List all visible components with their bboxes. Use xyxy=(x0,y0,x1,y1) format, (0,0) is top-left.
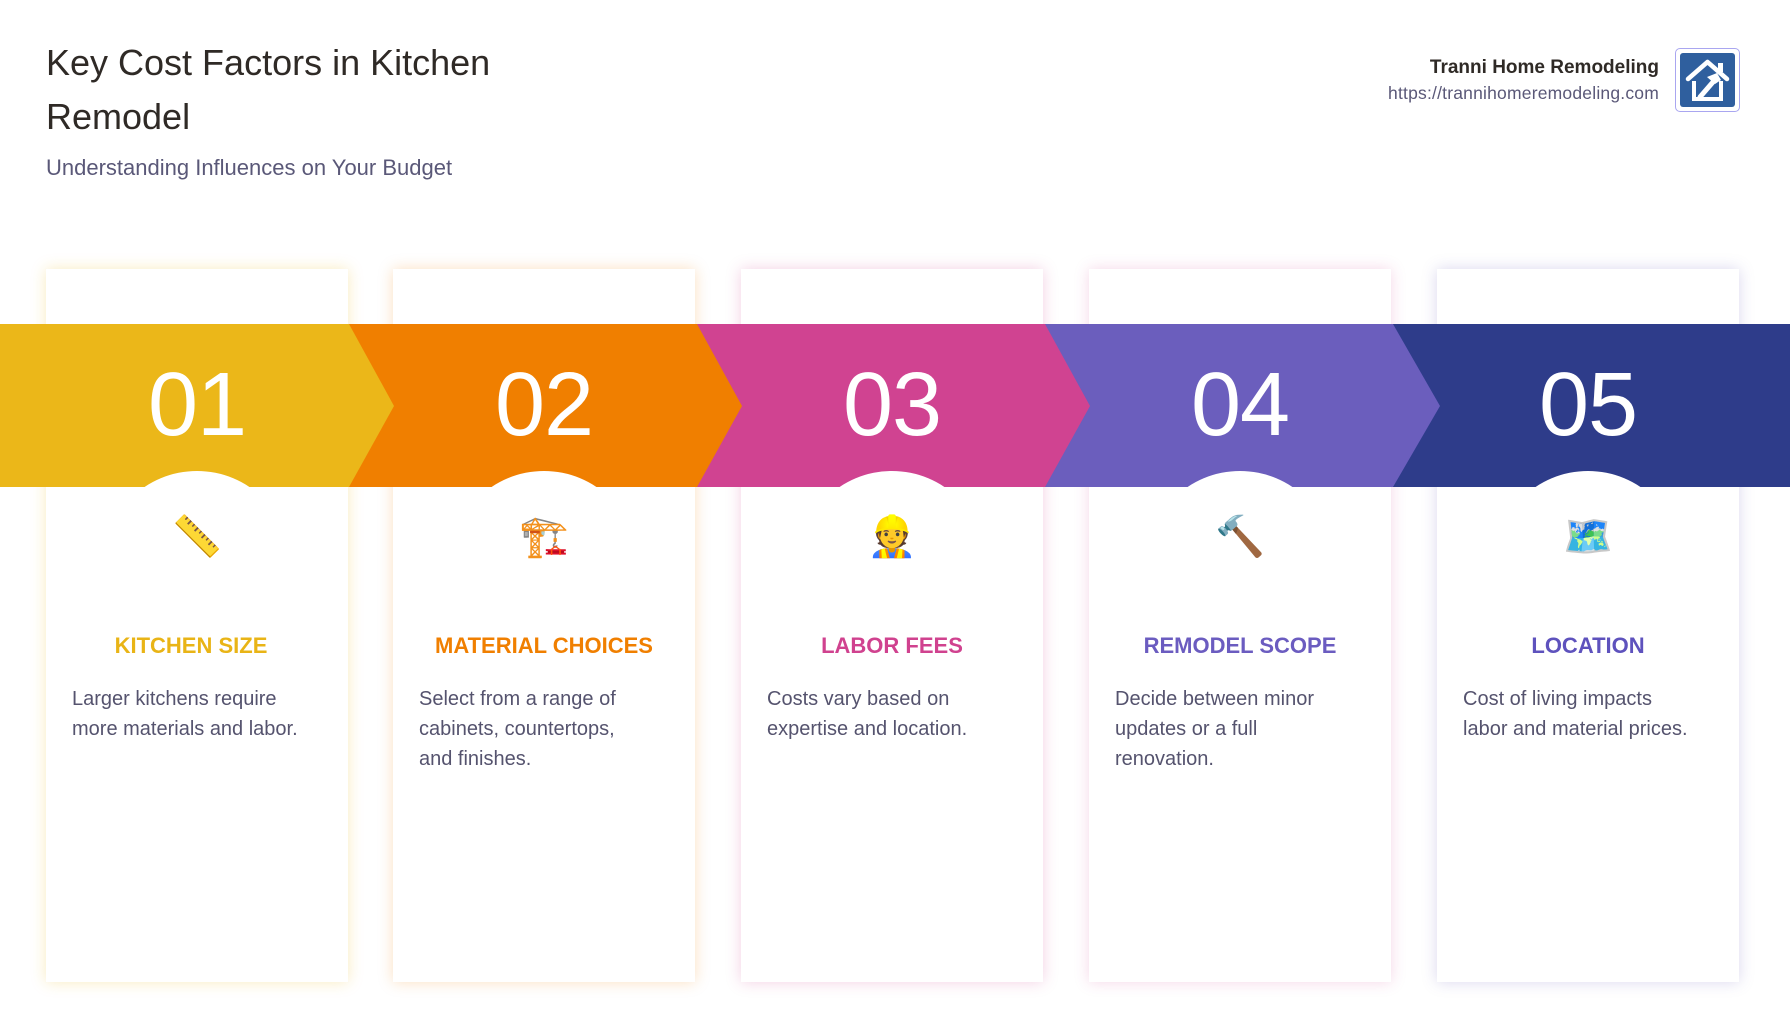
card 3 xyxy=(741,269,1043,982)
number 01: 01 xyxy=(148,355,246,455)
icon: ruler: 📏 xyxy=(172,515,222,559)
number 02: 02 xyxy=(495,355,593,455)
heading: material choices: MATERIAL CHOICES xyxy=(435,633,653,658)
chevron band xyxy=(0,324,1790,487)
brand text xyxy=(1388,57,1659,103)
card 1 xyxy=(46,269,348,982)
text: location: Cost of living impacts labor and material prices. xyxy=(1463,688,1688,740)
text: material choices: Select from a range of cabinets, countertops, and finishes. xyxy=(419,688,616,770)
icon: worker: 👷 xyxy=(867,515,917,559)
card 5 xyxy=(1437,269,1739,982)
text: kitchen size: Larger kitchens require more materials and labor. xyxy=(72,688,298,740)
brand text: Tranni Home Remodeling xyxy=(1430,57,1659,78)
card 2 xyxy=(393,269,695,982)
brand text: https://trannihomeremodeling.com xyxy=(1388,83,1659,103)
icon: hammer: 🔨 xyxy=(1215,515,1265,559)
icon: logo xyxy=(1675,48,1740,112)
heading: remodel scope: REMODEL SCOPE xyxy=(1144,633,1336,658)
number 04: 04 xyxy=(1191,355,1289,455)
heading: labor fees: LABOR FEES xyxy=(821,633,963,658)
title: Key Cost Factors in Kitchen Remodel xyxy=(46,42,490,137)
white circles xyxy=(103,471,291,659)
text: labor fees: Costs vary based on expertise and location. xyxy=(767,688,967,740)
subtitle: Understanding Influences on Your Budget xyxy=(46,155,452,180)
icon: map: 🗺️ xyxy=(1563,515,1613,559)
text: remodel scope: Decide between minor updates or a full renovation. xyxy=(1115,688,1314,770)
icon: crane: 🏗️ xyxy=(519,515,569,559)
number 05: 05 xyxy=(1539,355,1637,455)
heading: location: LOCATION xyxy=(1531,633,1645,658)
heading: kitchen size: KITCHEN SIZE xyxy=(115,633,267,658)
card 4 xyxy=(1089,269,1391,982)
number 03: 03 xyxy=(843,355,941,455)
